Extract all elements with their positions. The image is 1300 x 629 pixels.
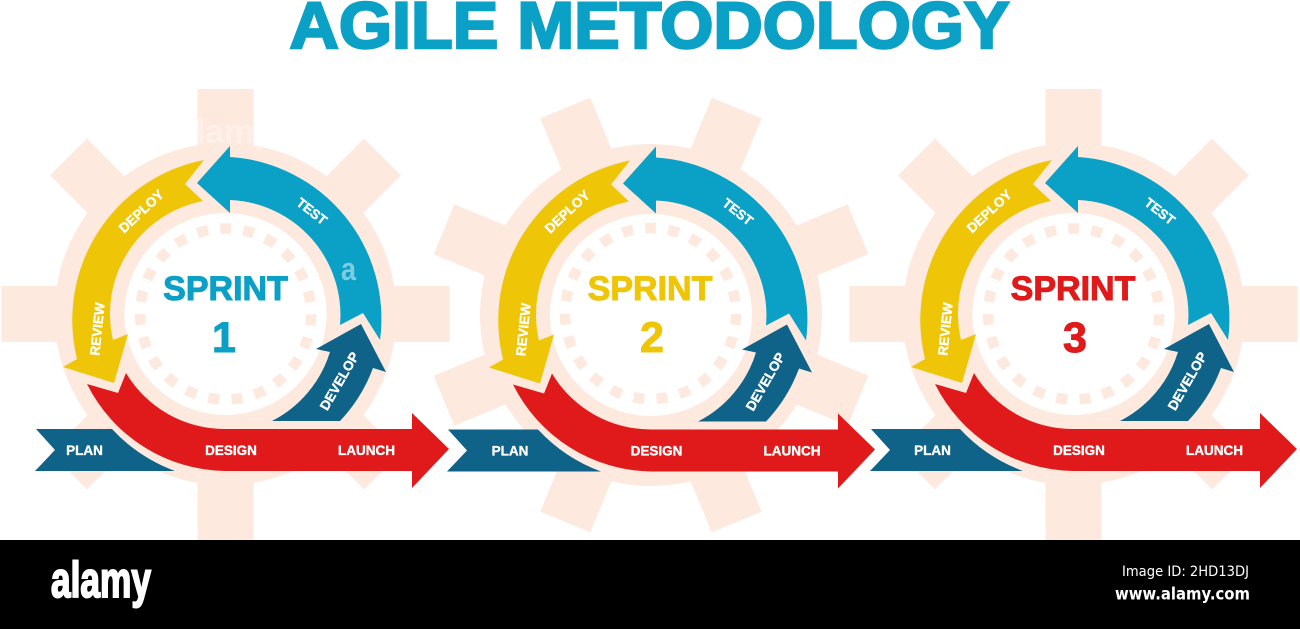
watermark: a [341, 251, 356, 287]
label: plan: PLAN [914, 443, 951, 458]
gear: sprint 2 [434, 98, 868, 532]
label: develop: DEVELOP [743, 350, 788, 413]
arrow: plan [447, 430, 601, 472]
label: design: DESIGN [205, 443, 257, 458]
arrow: plan [870, 429, 1023, 471]
panel: sprint 3 [850, 89, 1298, 540]
arrow: design and launch [935, 373, 1297, 488]
label: deploy: DEPLOY [116, 187, 167, 236]
label: launch: LAUNCH [338, 443, 395, 458]
label: develop: DEVELOP [1165, 350, 1210, 413]
sprint 3 number: 3 [1063, 314, 1087, 362]
sprint 1 number: 1 [212, 314, 236, 362]
label: deploy: DEPLOY [542, 187, 593, 236]
arrow: test [1045, 146, 1229, 340]
gear: sprint 3 [850, 89, 1298, 540]
website: www.alamy.com [1115, 584, 1250, 604]
label: develop: DEVELOP [317, 350, 362, 413]
label: launch: LAUNCH [764, 444, 820, 458]
arrow: deploy and review [911, 160, 1052, 383]
gear: sprint 1 [2, 89, 450, 540]
label: test: TEST [1141, 195, 1178, 228]
sprint 1 heading: SPRINT [163, 270, 288, 308]
label: review: REVIEW [87, 302, 108, 356]
arrow: develop [1120, 324, 1234, 421]
arrow: develop [698, 324, 812, 422]
footer bar [0, 540, 1300, 629]
sprint 2 heading: SPRINT [588, 270, 713, 308]
arrow: deploy and review [489, 160, 630, 384]
image id: Image ID: 2HD13DJ [1122, 564, 1249, 580]
sprint 3 heading: SPRINT [1011, 270, 1136, 308]
label: design: DESIGN [631, 444, 682, 458]
label: plan: PLAN [492, 444, 528, 458]
arrows: sprint 2 cycle [447, 146, 875, 488]
label: launch: LAUNCH [1186, 443, 1243, 458]
arrow: test [197, 146, 381, 340]
label: plan: PLAN [66, 443, 103, 458]
sprint 2 number: 2 [640, 314, 664, 362]
label: test: TEST [719, 195, 756, 229]
panel: sprint 2 [434, 98, 875, 532]
label: test: TEST [293, 195, 330, 228]
arrow: develop [272, 324, 386, 421]
label: deploy: DEPLOY [964, 187, 1015, 236]
label: review: REVIEW [935, 302, 956, 356]
watermark: alamy [177, 113, 273, 151]
arrows: sprint 3 cycle [870, 146, 1297, 488]
arrow: deploy and review [63, 160, 204, 383]
arrow: design and launch [513, 374, 875, 488]
arrow: design and launch [87, 373, 449, 488]
arrow: plan [35, 429, 175, 471]
label: review: REVIEW [513, 302, 534, 357]
arrow: test [623, 146, 807, 340]
panel: sprint 1 [2, 89, 450, 540]
label: design: DESIGN [1053, 443, 1105, 458]
footer logo: alamy [51, 552, 151, 608]
